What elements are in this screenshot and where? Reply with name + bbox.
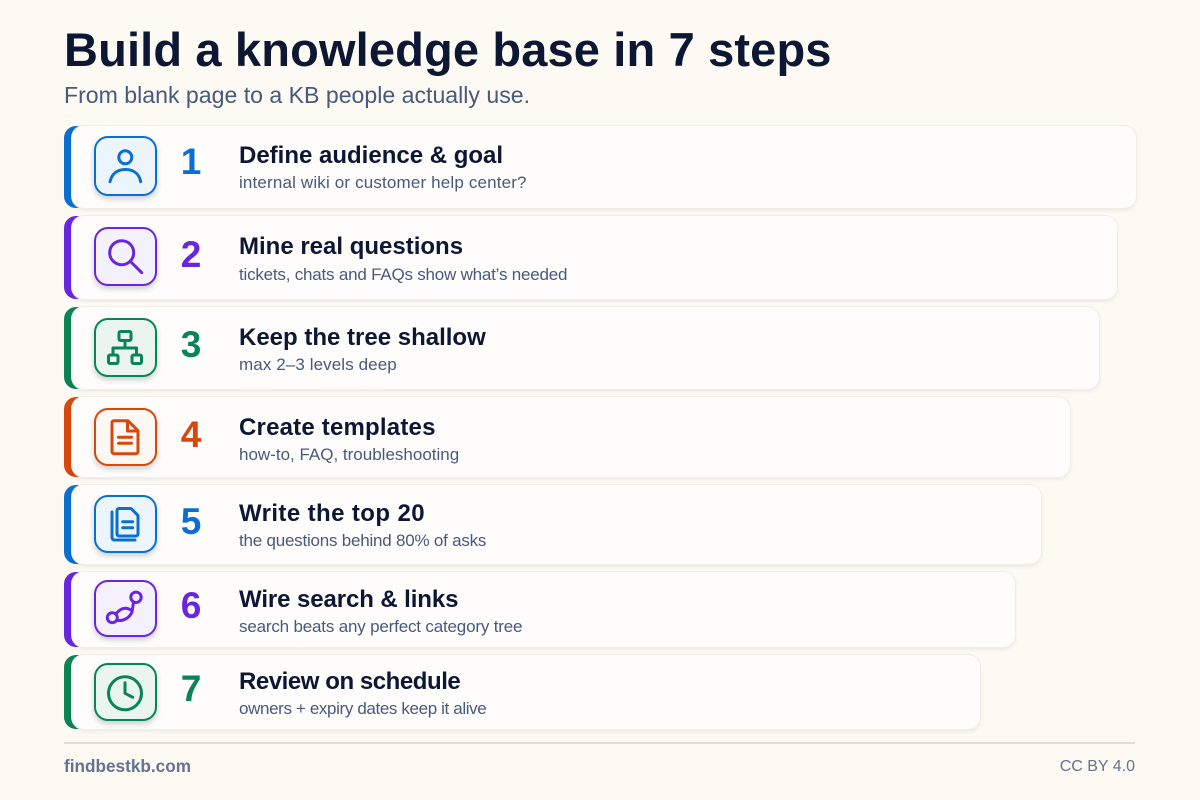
- step number 6: 6: [181, 585, 201, 626]
- step number 2: 2: [181, 234, 201, 275]
- step 4 description: how-to, FAQ, troubleshooting: [239, 445, 459, 464]
- step number 5: 5: [181, 501, 201, 542]
- icon: magnifier: [94, 227, 157, 286]
- title: Build a knowledge base in 7 steps: [64, 23, 832, 76]
- panel: step 5: [64, 484, 1042, 566]
- step number 4: 4: [181, 414, 201, 455]
- step 6 heading: Wire search & links: [239, 586, 458, 613]
- step 7 heading: Review on schedule: [239, 668, 460, 695]
- icon: person: [94, 136, 157, 196]
- step number 3: 3: [181, 324, 201, 365]
- step 5 description: the questions behind 80% of asks: [239, 531, 486, 550]
- step 5 heading: Write the top 20: [239, 500, 425, 527]
- step 4 heading: Create templates: [239, 414, 436, 441]
- panel: step 1: [64, 125, 1137, 210]
- step 1 heading: Define audience & goal: [239, 142, 503, 169]
- icon: documents: [94, 495, 157, 553]
- footer: license: CC BY 4.0: [1060, 758, 1135, 775]
- panel: step 4: [64, 396, 1071, 480]
- step 7 description: owners + expiry dates keep it alive: [239, 699, 486, 718]
- panel: step 6: [64, 571, 1016, 650]
- step number 1: 1: [181, 141, 201, 182]
- footer: site name: findbestkb.com: [64, 756, 191, 776]
- icon: tree: [94, 318, 157, 377]
- step number 7: 7: [181, 668, 201, 709]
- step 3 description: max 2–3 levels deep: [239, 355, 397, 374]
- step 2 heading: Mine real questions: [239, 233, 463, 260]
- step 6 description: search beats any perfect category tree: [239, 617, 522, 636]
- step 3 heading: Keep the tree shallow: [239, 324, 486, 351]
- icon: linked nodes: [94, 580, 157, 637]
- panel: step 7: [64, 654, 981, 732]
- step 2 description: tickets, chats and FAQs show what’s needed: [239, 265, 567, 284]
- icon: document: [94, 408, 157, 466]
- subtitle: From blank page to a KB people actually use.: [64, 82, 530, 108]
- panel: step 2: [64, 215, 1118, 302]
- icon: clock: [94, 663, 157, 721]
- step 1 description: internal wiki or customer help center?: [239, 173, 527, 192]
- panel: step 3: [64, 306, 1100, 392]
